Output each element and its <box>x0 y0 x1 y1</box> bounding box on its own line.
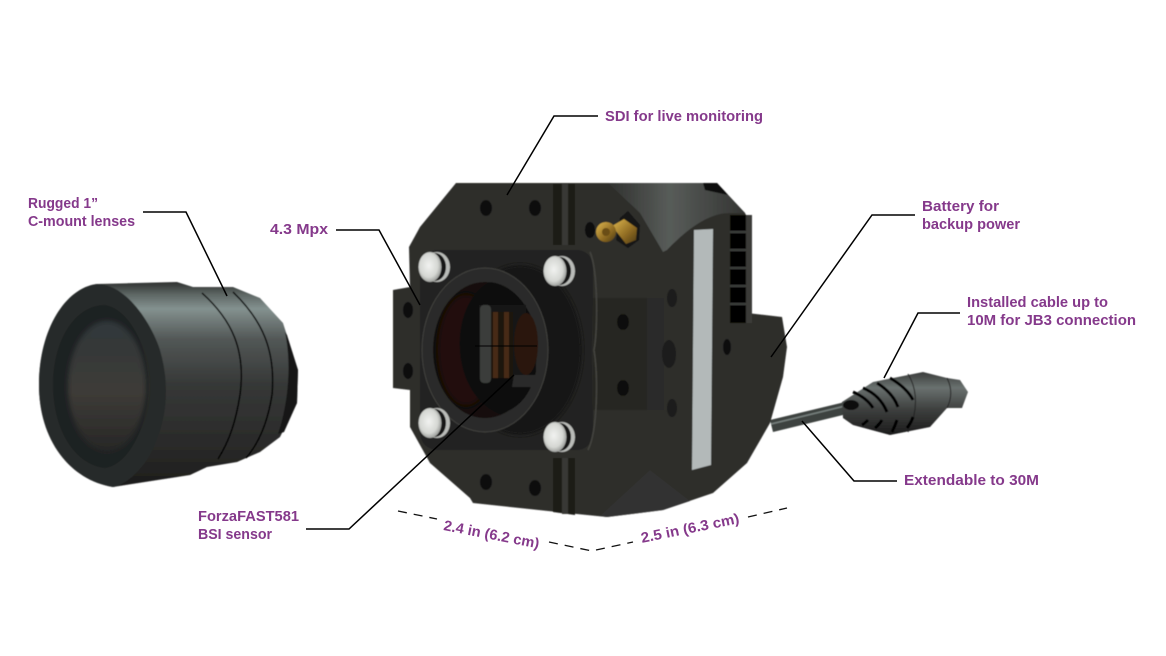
camera body illustration <box>393 183 847 517</box>
cable connector illustration <box>842 372 968 435</box>
sensor <box>479 305 538 387</box>
callout: rugged lenses: Rugged 1” <box>28 196 98 212</box>
callout: SDI for live monitoring: SDI for live monitoring <box>605 109 763 125</box>
mount ring <box>458 265 582 435</box>
callout: SDI for live monitoring <box>507 109 763 195</box>
callout: battery: backup power <box>922 217 1020 233</box>
front plate <box>420 250 593 450</box>
callout: 4.3 Mpx <box>270 222 420 305</box>
callout: extendable: Extendable to 30M <box>904 473 1039 489</box>
SDI connector <box>585 211 640 248</box>
white strip <box>692 229 713 470</box>
callout: sensor <box>198 346 537 543</box>
housing outline <box>393 183 787 517</box>
lower facet <box>600 470 690 517</box>
cable <box>770 402 847 432</box>
lens illustration <box>39 282 298 487</box>
callout: sensor: ForzaFAST581 <box>198 509 299 525</box>
callout: installed cable: 10M for JB3 connection <box>967 313 1136 329</box>
callout: battery: Battery for <box>922 199 999 215</box>
callout: battery <box>771 199 1020 357</box>
callout: rugged lenses: C-mount lenses <box>28 214 135 230</box>
dimension: width: 2.4 in (6.2 cm) <box>442 518 541 552</box>
callout: rugged lenses <box>28 196 227 296</box>
callout: extendable <box>802 421 1039 489</box>
callout: 4.3 Mpx: 4.3 Mpx <box>270 222 328 238</box>
right tab <box>593 298 647 410</box>
callout: installed cable <box>884 295 1136 378</box>
screws <box>418 252 575 452</box>
dimension: width <box>398 511 592 552</box>
mounting holes <box>403 200 731 496</box>
mount hole <box>433 282 537 418</box>
callout: installed cable: Installed cable up to <box>967 295 1108 311</box>
dimension: depth: 2.5 in (6.3 cm) <box>640 511 741 547</box>
dimension: depth <box>596 508 787 550</box>
channels <box>553 184 575 245</box>
upper shell highlight <box>608 183 745 252</box>
callout: sensor: BSI sensor <box>198 527 272 543</box>
vent fins <box>730 215 752 323</box>
